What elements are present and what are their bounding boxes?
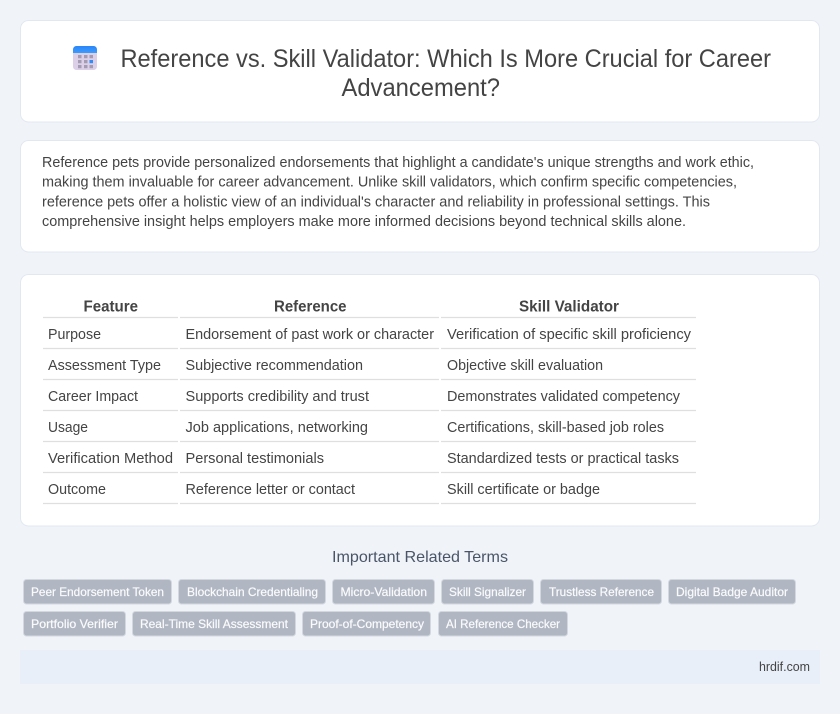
tags: related terms: Micro-Validation [340, 585, 427, 599]
row: usage: Certifications, skill-based job roles [447, 420, 664, 436]
icon: calendar [73, 46, 97, 70]
row: verification method [48, 451, 679, 467]
row: purpose [48, 327, 692, 343]
tags: related terms: Real-Time Skill Assessment [140, 617, 289, 631]
row: usage: Usage [48, 420, 88, 436]
tags: related terms: Peer Endorsement Token [31, 585, 164, 599]
text block: summary: making them invaluable for career advancement. Unlike skill validators, which confirm specific competencies, [42, 174, 737, 190]
tags: related terms: Skill Signalizer [449, 585, 526, 599]
text block: summary [42, 155, 754, 230]
row: usage [48, 420, 664, 436]
text block: summary: reference pets offer a holistic view of an individual's character and reliability in professional settings. This [42, 194, 710, 210]
tags: related terms: Digital Badge Auditor [676, 585, 788, 599]
row: usage: Job applications, networking [186, 420, 368, 436]
row: assessment type [48, 358, 603, 374]
heading: important related terms: Important Related Terms [332, 549, 508, 566]
row: verification method: Personal testimonials [186, 451, 324, 467]
row: career impact: Demonstrates validated competency [447, 389, 681, 405]
row: outcome: Outcome [48, 482, 106, 498]
text block: summary: Reference pets provide personalized endorsements that highlight a candidate's unique strengths and work ethic, [42, 155, 754, 171]
row: career impact: Career Impact [48, 389, 138, 405]
row: assessment type: Objective skill evaluation [447, 358, 603, 374]
row: career impact [48, 389, 681, 405]
row: verification method: Verification Method [48, 451, 173, 467]
tags: related terms: Blockchain Credentialing [187, 585, 318, 599]
row: outcome: Skill certificate or badge [447, 482, 600, 498]
table header: Feature [84, 298, 138, 316]
table header: Skill Validator [519, 298, 619, 316]
panel: title card [20, 20, 820, 122]
row: assessment type: Subjective recommendation [186, 358, 363, 374]
footer: hrdif.com [759, 660, 810, 674]
row: purpose: Purpose [48, 327, 101, 343]
tags: related terms: AI Reference Checker [446, 617, 560, 631]
panel: summary paragraph [20, 140, 820, 252]
text block: summary: comprehensive insight helps employers make more informed decisions beyond technical skills alone. [42, 214, 686, 230]
row: outcome: Reference letter or contact [186, 482, 355, 498]
tags: related terms: Proof-of-Competency [310, 617, 424, 631]
tags: related terms [24, 580, 796, 636]
row: purpose: Verification of specific skill proficiency [447, 327, 692, 343]
row: career impact: Supports credibility and trust [186, 389, 369, 405]
row: purpose: Endorsement of past work or character [186, 327, 434, 343]
row: verification method: Standardized tests or practical tasks [447, 451, 679, 467]
tags: related terms: Trustless Reference [549, 585, 654, 599]
table header: Reference [274, 298, 347, 316]
panel: comparison table [20, 274, 820, 526]
row: outcome [48, 482, 600, 498]
tags: related terms: Portfolio Verifier [31, 617, 118, 631]
title [120, 45, 771, 102]
title: Reference vs. Skill Validator: Which Is More Crucial for Career [120, 45, 771, 73]
row: assessment type: Assessment Type [48, 358, 161, 374]
title: Advancement? [342, 74, 500, 102]
table header [84, 298, 619, 316]
footer [20, 650, 820, 684]
